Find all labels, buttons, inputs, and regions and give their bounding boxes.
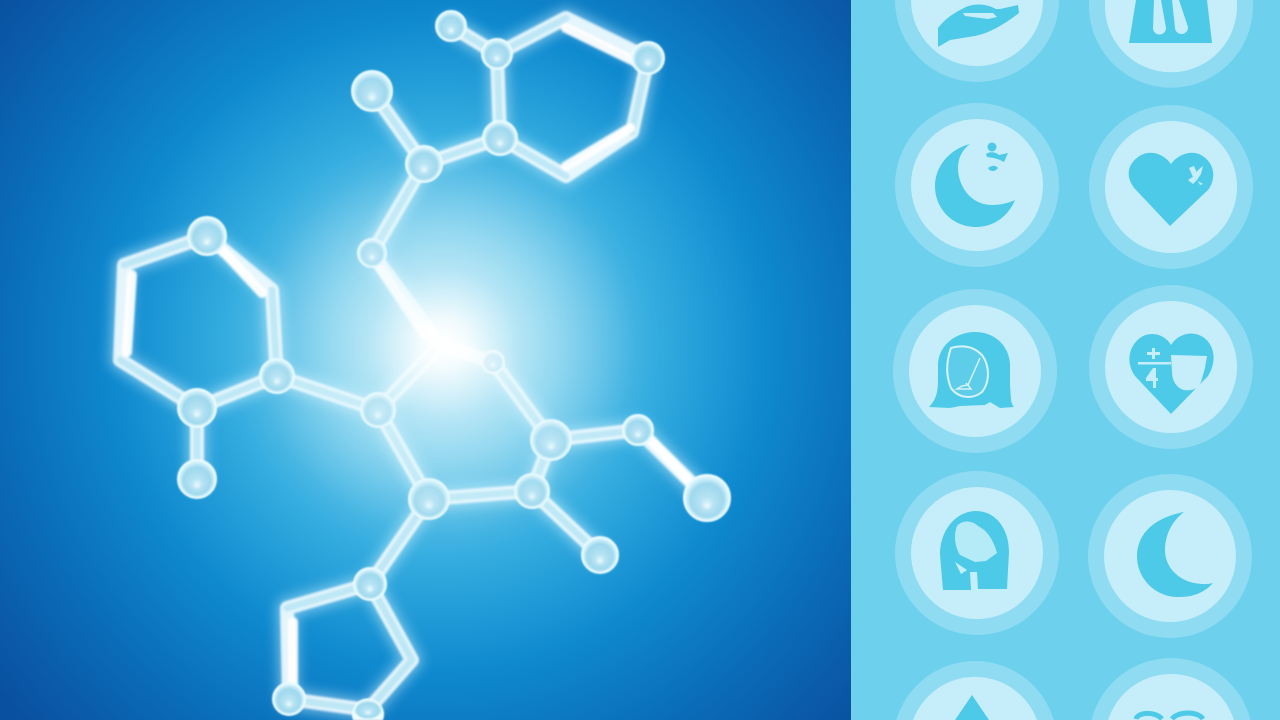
icon badge: road: [1089, 0, 1253, 88]
icon badge: head with brain: [895, 471, 1059, 635]
icon badge: caring hand: [895, 0, 1059, 82]
background: blue radial gradient: [0, 0, 852, 720]
icon badge: heart outline: [1092, 658, 1250, 720]
icon badge: heart with sparkles: [1089, 105, 1253, 269]
molecule: atoms: [178, 11, 730, 720]
molecule: bonds: [120, 18, 707, 710]
panel: wellness icons: [851, 0, 1280, 720]
icon badge: crescent moon: [1088, 474, 1252, 638]
icon badge: water drop: [896, 661, 1054, 720]
icon badge: head with clock: [893, 289, 1057, 453]
icon badge: heart with fraction and cup: [1089, 285, 1253, 449]
central light flare: [255, 155, 635, 535]
icon badge: crescent moon with sprig: [895, 103, 1059, 267]
